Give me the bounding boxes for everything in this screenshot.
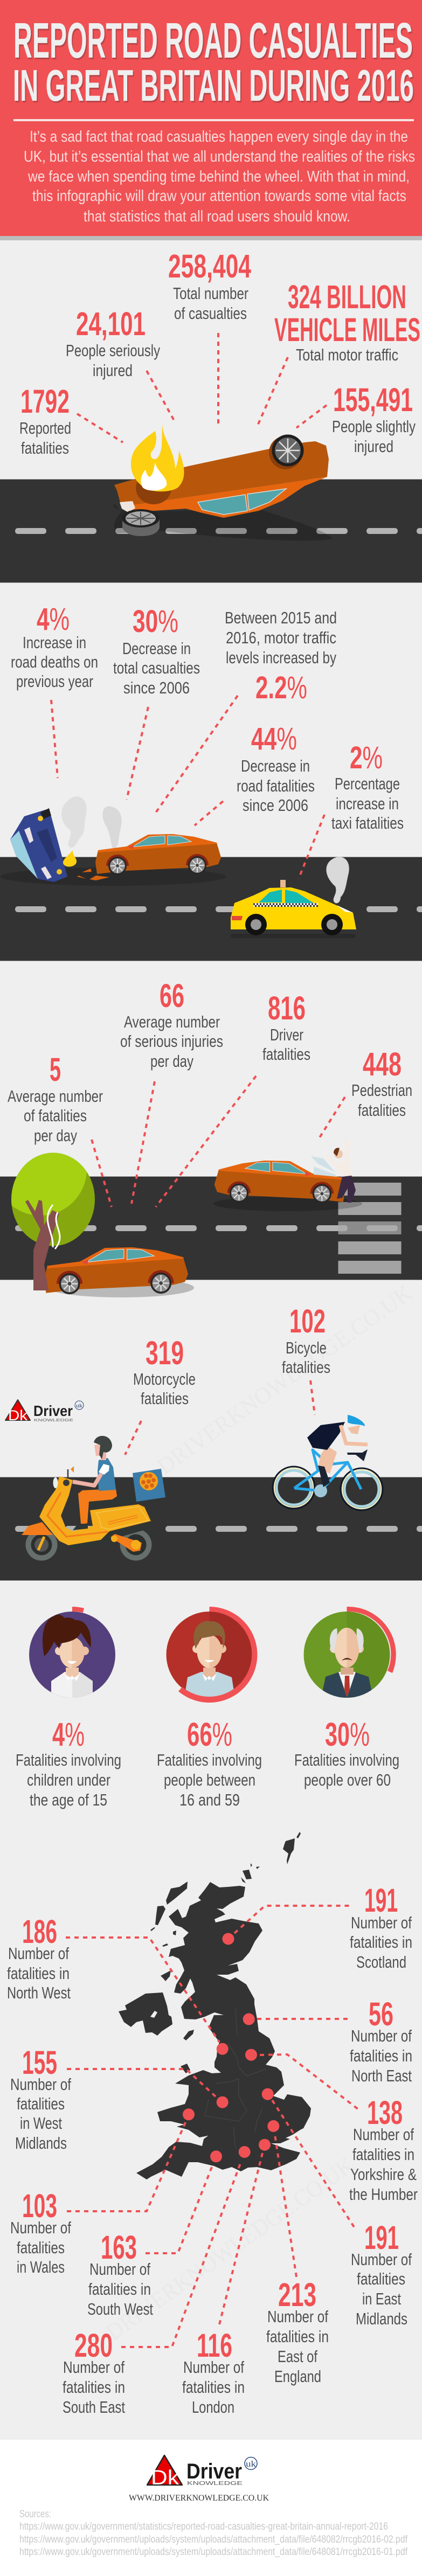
dashed leader lines: section 4 xyxy=(125,1380,315,1455)
stat: 163 South West: South West xyxy=(87,2300,153,2318)
stat: 191 East Midlands: in East xyxy=(362,2289,401,2308)
stat: 163 South West: 163 xyxy=(101,2229,137,2266)
stat: 44% decrease in fatalities: 44% xyxy=(251,721,297,756)
stat: 186 North West: Number of xyxy=(8,1944,69,1963)
portrait: adult 66% xyxy=(166,1612,253,1698)
stat: 155,491 slightly injured: injured xyxy=(354,437,393,456)
stat: 30% decrease in casualties: 30% xyxy=(133,604,178,639)
stat: 191 East Midlands xyxy=(351,2219,412,2328)
stat: 30% decrease in casualties: Decrease in xyxy=(122,639,191,658)
stat: 191 East Midlands: 191 xyxy=(364,2219,399,2256)
watermark: upper: DRIVERKNOWLEDGE.CO.UK xyxy=(153,1280,417,1480)
stat: 4% increase in road deaths: 4% xyxy=(37,602,70,637)
stat: 1792 reported fatalities: Reported xyxy=(19,419,71,438)
stat: 5 fatalities per day: Average number xyxy=(8,1087,103,1106)
stat: 4% increase in road deaths xyxy=(11,602,98,691)
stat: 30% decrease in casualties: since 2006 xyxy=(123,678,190,697)
icon: delivery box xyxy=(133,1469,166,1503)
icon: smoke taxi xyxy=(326,857,349,903)
dashed leader lines: section 2 xyxy=(51,696,324,879)
icon: rear wheel xyxy=(273,1467,315,1509)
map: region markers xyxy=(183,1933,279,2162)
ring: 4% xyxy=(72,1607,84,1613)
stat: 4% children: Fatalities involving xyxy=(16,1751,121,1769)
icon: crashed orange car xyxy=(44,1247,188,1294)
stat: 103 Wales: fatalities xyxy=(17,2238,65,2257)
icon: orange car facing right xyxy=(215,1161,345,1203)
stat: 44% decrease in fatalities: since 2006 xyxy=(243,796,308,815)
stat: 280 South East: 280 xyxy=(74,2327,113,2364)
stat: 24,101 seriously injured: People seriously xyxy=(66,341,160,360)
stat: 1792 reported fatalities xyxy=(19,383,71,457)
stat: 163 South West xyxy=(87,2229,153,2318)
footer panel xyxy=(0,2440,422,2576)
Isle of Man xyxy=(183,2030,194,2040)
icon: debris xyxy=(77,869,109,880)
dashed leader lines: section 1 xyxy=(77,333,327,442)
icon: front wheel xyxy=(341,1468,383,1510)
stat: 324 billion vehicle miles xyxy=(274,279,420,364)
stat: 213 East of England xyxy=(266,2276,329,2386)
stat: 816 driver fatalities: Driver xyxy=(270,1025,303,1044)
stat: 56 North East: 56 xyxy=(369,1996,393,2032)
sources: Sources: xyxy=(19,2509,51,2520)
road: section 2 xyxy=(0,857,422,961)
stat: 186 North West: North West xyxy=(7,1983,71,2002)
stat: 66% adults: 66% xyxy=(187,1716,232,1753)
stat: 163 South West: fatalities in xyxy=(88,2280,151,2299)
stat: 4% children: the age of 15 xyxy=(30,1790,107,1809)
stat: 258,404 total casualties: of casualties xyxy=(174,304,247,323)
stat: 319 motorcycle fatalities xyxy=(133,1335,196,1408)
stat: 191 Scotland: Scotland xyxy=(356,1953,406,1971)
stat: 186 North West xyxy=(7,1913,71,2002)
stat: 448 pedestrian fatalities: 448 xyxy=(363,1046,402,1082)
stat: 1792 reported fatalities: 1792 xyxy=(20,383,70,420)
road: section 4 xyxy=(0,1477,422,1581)
stat: 155 West Midlands: Midlands xyxy=(15,2134,67,2153)
illustration: cyclist xyxy=(273,1415,383,1510)
logo: Driver Knowledge small xyxy=(5,1400,84,1424)
stat: 448 pedestrian fatalities: fatalities xyxy=(358,1101,406,1120)
icon: upper wheel xyxy=(272,434,304,467)
stat: 24,101 seriously injured: 24,101 xyxy=(76,305,146,342)
stat: 66 serious injuries per day: Average number xyxy=(124,1012,220,1031)
stat: 5 fatalities per day: of fatalities xyxy=(24,1106,87,1125)
stat: 102 bicycle fatalities: Bicycle xyxy=(286,1338,327,1357)
stat: 103 Wales: Number of xyxy=(10,2218,71,2237)
stat: 186 North West: fatalities in xyxy=(7,1964,70,1983)
stat: 4% children xyxy=(16,1716,121,1809)
stat: 155 West Midlands: Number of xyxy=(10,2075,71,2094)
icon: front wheel xyxy=(26,1529,57,1560)
watermark: lower: DRIVERKNOWLEDGE.CO.UK xyxy=(102,2153,359,2345)
stat: 213 East of England: England xyxy=(274,2367,321,2386)
icon: flame xyxy=(131,423,184,491)
logo: Driver Knowledge small: KNOWLEDGE xyxy=(34,1419,74,1422)
stat: 280 South East: Number of xyxy=(63,2358,124,2377)
stat: 816 driver fatalities: 816 xyxy=(268,990,306,1026)
stat: 280 South East: fatalities in xyxy=(63,2378,125,2397)
stat: 816 driver fatalities: fatalities xyxy=(262,1045,310,1064)
stat: 56 North East xyxy=(350,1996,412,2085)
stat: 30% over 60 xyxy=(294,1716,399,1789)
panel: age group portraits xyxy=(29,1607,396,1703)
ring: 66% xyxy=(178,1607,257,1703)
stat: 116 London xyxy=(182,2327,245,2417)
regional borders xyxy=(205,2008,266,2148)
road: section 3 xyxy=(0,1176,422,1280)
logo: Driver Knowledge small: Dk xyxy=(8,1407,28,1424)
stat: 1792 reported fatalities: fatalities xyxy=(21,439,69,457)
stat: 319 motorcycle fatalities: 319 xyxy=(146,1335,184,1371)
stat: 155 West Midlands xyxy=(10,2044,71,2153)
dashed leader lines: section 3 xyxy=(92,1076,345,1207)
stat: 103 Wales: 103 xyxy=(22,2188,57,2224)
icon: rear wheel xyxy=(120,1529,152,1560)
stat: 191 East Midlands: fatalities xyxy=(357,2269,405,2288)
title xyxy=(13,12,415,112)
stat: 103 Wales xyxy=(10,2188,71,2276)
intro text xyxy=(24,128,415,225)
stat: 30% over 60: people over 60 xyxy=(304,1770,391,1789)
stat: 44% decrease in fatalities: Decrease in xyxy=(241,756,310,775)
stat: 2.2% traffic increase: 2016, motor traffic xyxy=(226,628,336,647)
stat: 816 driver fatalities xyxy=(262,990,310,1064)
Lough Neagh xyxy=(150,2011,157,2018)
stat: 258,404 total casualties: 258,404 xyxy=(168,248,251,284)
icon: impact lines xyxy=(311,1156,337,1177)
stat: 66 serious injuries per day: 66 xyxy=(160,977,184,1014)
icon: smoke centre xyxy=(102,806,122,850)
logo: Driver Knowledge xyxy=(147,2455,257,2489)
stat: 116 London: Number of xyxy=(183,2358,244,2377)
stat: 324 billion vehicle miles: Total motor traffic xyxy=(296,345,398,364)
stat: 258,404 total casualties xyxy=(168,248,251,323)
stat: 2.2% traffic increase xyxy=(225,608,337,705)
stat: 2% taxi fatalities: increase in xyxy=(336,794,399,813)
stat: 2.2% traffic increase: 2.2% xyxy=(255,670,307,705)
sources xyxy=(19,2509,408,2558)
stat: 191 Scotland xyxy=(350,1882,412,1971)
stat: 2% taxi fatalities xyxy=(331,740,404,832)
stat: 116 London: 116 xyxy=(197,2327,232,2364)
stat: 102 bicycle fatalities xyxy=(282,1303,330,1377)
logo: Driver Knowledge: Dk xyxy=(151,2467,179,2489)
stat: 4% increase in road deaths: road deaths on xyxy=(11,652,98,671)
zebra crossing xyxy=(338,1183,401,1274)
stat: 163 South West: Number of xyxy=(89,2260,150,2279)
dashed leader lines: map xyxy=(66,1906,358,2347)
stat: 155 West Midlands: 155 xyxy=(22,2044,57,2081)
stat: 2% taxi fatalities: Percentage xyxy=(335,774,400,793)
stat: 116 London: fatalities in xyxy=(182,2378,245,2397)
stat: 155 West Midlands: fatalities xyxy=(17,2094,65,2113)
stat: 2.2% traffic increase: levels increased by xyxy=(226,648,336,667)
stat: 66% adults: people between xyxy=(164,1770,255,1789)
Shetland xyxy=(283,1832,301,1864)
stat: 191 East Midlands: Midlands xyxy=(356,2309,407,2328)
icon: tree xyxy=(11,1153,95,1290)
website url: WWW.DRIVERKNOWLEDGE.CO.UK xyxy=(129,2494,269,2503)
stat: 2% taxi fatalities: taxi fatalities xyxy=(331,814,404,832)
ring: 30% xyxy=(347,1607,396,1673)
stat: 5 fatalities per day: 5 xyxy=(50,1051,61,1088)
stat: 213 East of England: East of xyxy=(278,2347,317,2366)
stat: 66 serious injuries per day: of serious injuries xyxy=(120,1032,223,1051)
stat: 213 East of England: Number of xyxy=(267,2307,328,2326)
stat: 4% increase in road deaths: previous year xyxy=(16,672,93,691)
illustration: crash scene xyxy=(1,796,226,886)
icon: detached wheel xyxy=(122,509,160,536)
intro text: that statistics that all road users should know. xyxy=(84,208,350,225)
stat: 24,101 seriously injured: injured xyxy=(93,361,133,380)
Northern Ireland xyxy=(119,1992,172,2036)
stat: 448 pedestrian fatalities xyxy=(351,1046,412,1120)
stat: 138 Yorkshire and the Humber xyxy=(349,2094,418,2204)
logo: Driver Knowledge small: Driver xyxy=(33,1402,73,1419)
portrait: older adult 30% xyxy=(304,1612,390,1698)
stat: 44% decrease in fatalities: road fatalities xyxy=(237,776,315,795)
icon: small flame xyxy=(63,850,77,867)
Great Britain mainland xyxy=(136,1882,311,2179)
stat: 319 motorcycle fatalities: Motorcycle xyxy=(133,1370,196,1388)
stat: 30% decrease in casualties: total casualties xyxy=(113,658,200,677)
stat: 319 motorcycle fatalities: fatalities xyxy=(141,1389,189,1408)
illustration: yellow taxi xyxy=(231,880,356,938)
stat: 191 Scotland: 191 xyxy=(364,1882,398,1919)
icon: smoke left xyxy=(61,796,87,848)
icon: overturned blue car xyxy=(10,808,67,882)
stat: 66% adults: Fatalities involving xyxy=(157,1751,262,1769)
Outer Hebrides xyxy=(150,1881,188,1931)
stat: 102 bicycle fatalities: 102 xyxy=(289,1303,326,1339)
icon: pedestrian xyxy=(325,1139,356,1203)
stat: 213 East of England: fatalities in xyxy=(266,2327,329,2346)
stat: 186 North West: 186 xyxy=(22,1913,57,1950)
illustration: pedestrian collision xyxy=(213,1139,362,1211)
stat: 30% decrease in casualties xyxy=(113,604,200,697)
stat: 2.2% traffic increase: Between 2015 and xyxy=(225,608,337,627)
header panel xyxy=(0,0,422,240)
Inner Hebrides xyxy=(161,1931,176,1981)
illustration: car hit tree xyxy=(11,1153,194,1297)
logo: Driver Knowledge small: uk xyxy=(76,1402,83,1409)
logo: Driver Knowledge: Driver xyxy=(186,2460,242,2483)
stat: 66% adults xyxy=(157,1716,262,1809)
stat: 103 Wales: in Wales xyxy=(17,2258,65,2276)
logo: Driver Knowledge: uk xyxy=(246,2460,256,2469)
icon: rider xyxy=(73,1436,117,1530)
stat: 2% taxi fatalities: 2% xyxy=(350,740,383,775)
stat: 30% over 60: 30% xyxy=(325,1716,370,1753)
stat: 44% decrease in fatalities xyxy=(237,721,315,815)
stat: 4% increase in road deaths: Increase in xyxy=(23,633,86,652)
stat: 66% adults: 16 and 59 xyxy=(179,1790,240,1809)
stat: 4% children: children under xyxy=(27,1770,110,1789)
Orkney xyxy=(241,1863,260,1883)
stat: 4% children: 4% xyxy=(52,1716,85,1753)
stat: 66 serious injuries per day xyxy=(120,977,223,1071)
stat: 116 London: London xyxy=(192,2398,234,2417)
Anglesey xyxy=(181,2064,190,2073)
portrait: child 4% xyxy=(29,1612,115,1698)
stat: 102 bicycle fatalities: fatalities xyxy=(282,1358,330,1377)
stat: 155,491 slightly injured xyxy=(332,381,416,456)
stat: 280 South East: South East xyxy=(63,2398,125,2417)
illustration: delivery scooter xyxy=(22,1436,166,1560)
icon: orange car xyxy=(95,834,221,875)
stat: 5 fatalities per day: per day xyxy=(34,1126,77,1145)
logo: Driver Knowledge: KNOWLEDGE xyxy=(187,2481,243,2487)
stat: 280 South East xyxy=(63,2327,125,2417)
stat: 66 serious injuries per day: per day xyxy=(150,1052,193,1071)
stat: 155 West Midlands: in West xyxy=(20,2114,62,2133)
stat: 213 East of England: 213 xyxy=(278,2276,316,2313)
illustration: overturned burning car xyxy=(114,423,333,541)
map: United Kingdom xyxy=(119,1832,311,2179)
stat: 5 fatalities per day xyxy=(8,1051,103,1145)
stat: 24,101 seriously injured xyxy=(66,305,160,380)
stat: 258,404 total casualties: Total number xyxy=(173,284,248,303)
road: section 1 xyxy=(0,479,422,583)
stat: 138 Yorkshire and the Humber: 138 xyxy=(367,2094,403,2131)
